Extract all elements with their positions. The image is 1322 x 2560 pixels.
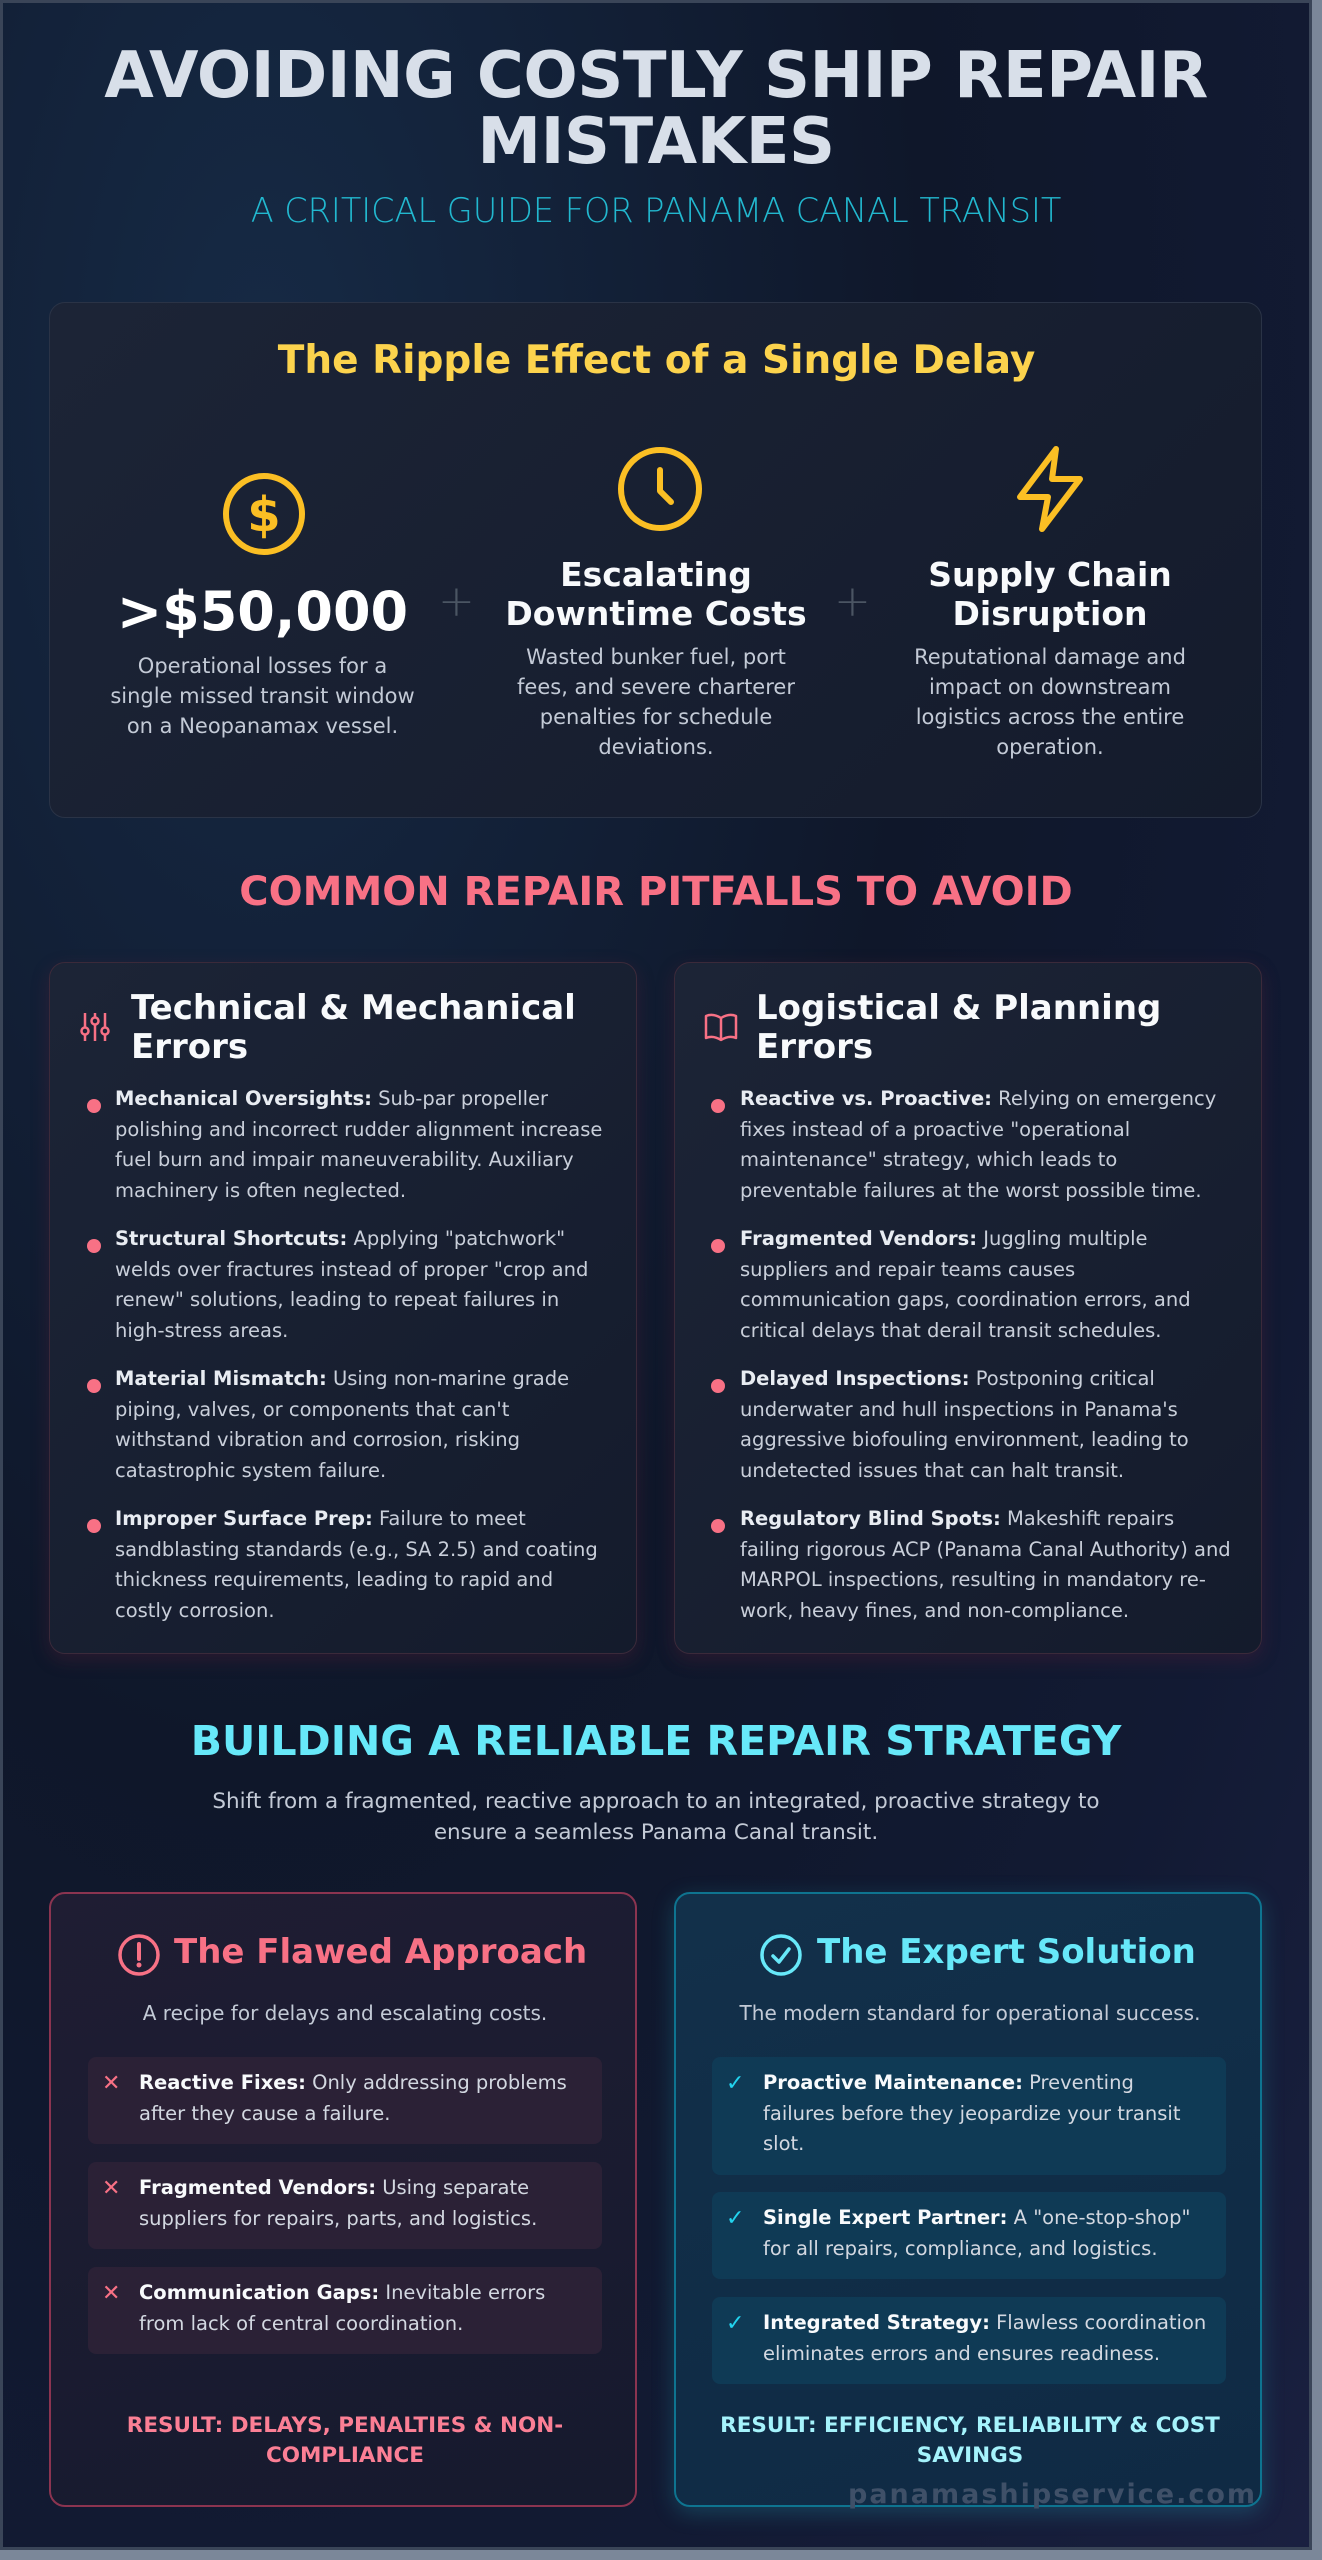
card heading: Errors <box>756 1027 873 1067</box>
stat: supply chain: Reputational damage and impact on downstream logistics across the entire operation. <box>914 645 1186 759</box>
stat: 50000: single missed transit window <box>110 684 415 708</box>
card heading with icon: The Flawed Approach <box>174 1932 587 1972</box>
item <box>88 2162 602 2249</box>
stat: supply chain: Disruption <box>952 594 1148 633</box>
list: Improper Surface Prep: Failure to meet sandblasting standards (e.g., SA 2.5) and coating thickness requirements, leading to rapid and costly corrosion. <box>115 1507 598 1622</box>
icon: coin <box>223 473 305 555</box>
stat: 50000 <box>110 580 415 738</box>
stat: downtime: Wasted bunker fuel, port fees, and severe charterer penalties for schedule deviations. <box>517 645 795 759</box>
icon: sliders <box>80 1013 110 1041</box>
card heading <box>131 988 576 1067</box>
item: ✕ <box>102 2071 120 2096</box>
item: ✓ <box>726 2206 744 2231</box>
panel: flawed approach <box>49 1892 637 2507</box>
card heading: Errors <box>131 1027 248 1067</box>
icon: bolt <box>1017 446 1083 532</box>
item: ✓ <box>726 2071 744 2096</box>
icon: plus separator: + <box>834 576 871 627</box>
stat: 50000: Operational losses for a <box>138 654 387 678</box>
icon: coin: $ <box>247 487 281 543</box>
subtitle: A CRITICAL GUIDE FOR PANAMA CANAL TRANSIT <box>251 191 1061 230</box>
card heading: Logistical & Planning <box>756 988 1161 1028</box>
title: AVOIDING COSTLY SHIP REPAIR <box>104 39 1208 113</box>
list: Fragmented Vendors: Juggling multiple suppliers and repair teams causes communication gaps, coordination errors, and critical delays that derail transit schedules. <box>740 1227 1191 1342</box>
item: Single Expert Partner: A "one-stop-shop" for all repairs, compliance, and logistics. <box>763 2206 1190 2260</box>
list: Material Mismatch: Using non-marine grade piping, valves, or components that can't withstand vibration and corrosion, risking catastrophic system failure. <box>115 1367 569 1482</box>
list: Reactive vs. Proactive: Relying on emergency fixes instead of a proactive "operational maintenance" strategy, which leads to preventable failures at the worst possible time. <box>740 1087 1216 1202</box>
panel: logistical errors <box>674 962 1262 1654</box>
item: Reactive Fixes: Only addressing problems after they cause a failure. <box>139 2071 567 2124</box>
section heading: pitfalls: COMMON REPAIR PITFALLS TO AVOID <box>239 869 1073 915</box>
item <box>712 2297 1226 2384</box>
result: RESULT: EFFICIENCY, RELIABILITY & COST SAVINGS <box>720 2413 1220 2468</box>
result: RESULT: DELAYS, PENALTIES & NON-COMPLIANCE <box>127 2413 563 2468</box>
panel: ripple effect <box>49 302 1262 818</box>
icon: clock <box>618 447 702 531</box>
stat: downtime: Escalating <box>560 555 752 594</box>
card subtitle: The modern standard for operational success. <box>740 2001 1200 2025</box>
card heading: Technical & Mechanical <box>131 988 576 1028</box>
stat: 50000: on a Neopanamax vessel. <box>127 714 398 738</box>
item <box>712 2192 1226 2279</box>
list: Structural Shortcuts: Applying "patchwork" welds over fractures instead of proper "crop and renew" solutions, leading to repeat failures in high-stress areas. <box>115 1227 588 1342</box>
item: ✕ <box>102 2176 120 2201</box>
list <box>87 1087 602 1622</box>
icon: plus separator: + <box>438 576 475 627</box>
watermark: panamashipservice.com <box>848 2479 1257 2510</box>
section heading: strategy: BUILDING A RELIABLE REPAIR STRATEGY <box>191 1717 1121 1765</box>
card heading with icon: The Expert Solution <box>817 1932 1196 1972</box>
stat: downtime <box>505 555 807 759</box>
list <box>711 1087 1231 1622</box>
item <box>88 2057 602 2144</box>
item <box>88 2267 602 2354</box>
stat: supply chain <box>914 555 1186 759</box>
icon: book <box>704 1014 738 1042</box>
card heading <box>756 988 1161 1067</box>
title: MISTAKES <box>477 105 835 179</box>
stat: downtime: Downtime Costs <box>505 594 807 633</box>
item: Fragmented Vendors: Using separate suppliers for repairs, parts, and logistics. <box>139 2176 537 2230</box>
list: Mechanical Oversights: Sub-par propeller polishing and incorrect rudder alignment increase fuel burn and impair maneuverability. Auxiliary machinery is often neglected. <box>115 1087 602 1202</box>
stat: 50000: >$50,000 <box>117 580 408 643</box>
panel heading: The Ripple Effect of a Single Delay <box>278 338 1035 383</box>
panel: expert solution <box>674 1892 1262 2507</box>
section subtitle: Shift from a fragmented, reactive approach to an integrated, proactive strategy to ensure a seamless Panama Canal transit. <box>212 1789 1100 1845</box>
item <box>712 2057 1226 2175</box>
item: Integrated Strategy: Flawless coordination eliminates errors and ensures readiness. <box>763 2311 1206 2364</box>
panel: technical errors <box>49 962 637 1654</box>
item: ✕ <box>102 2281 120 2306</box>
title <box>104 39 1208 179</box>
stat: supply chain: Supply Chain <box>928 555 1172 594</box>
item: Communication Gaps: Inevitable errors from lack of central coordination. <box>139 2281 545 2334</box>
item: ✓ <box>726 2311 744 2336</box>
list: Regulatory Blind Spots: Makeshift repairs failing rigorous ACP (Panama Canal Authority) and MARPOL inspections, resulting in mandatory re-work, heavy fines, and non-compliance. <box>740 1507 1231 1622</box>
item: Proactive Maintenance: Preventing failures before they jeopardize your transit slot. <box>763 2071 1180 2155</box>
card subtitle: A recipe for delays and escalating costs. <box>143 2001 547 2025</box>
list: Delayed Inspections: Postponing critical underwater and hull inspections in Panama's aggressive biofouling environment, leading to undetected issues that can halt transit. <box>740 1367 1189 1482</box>
